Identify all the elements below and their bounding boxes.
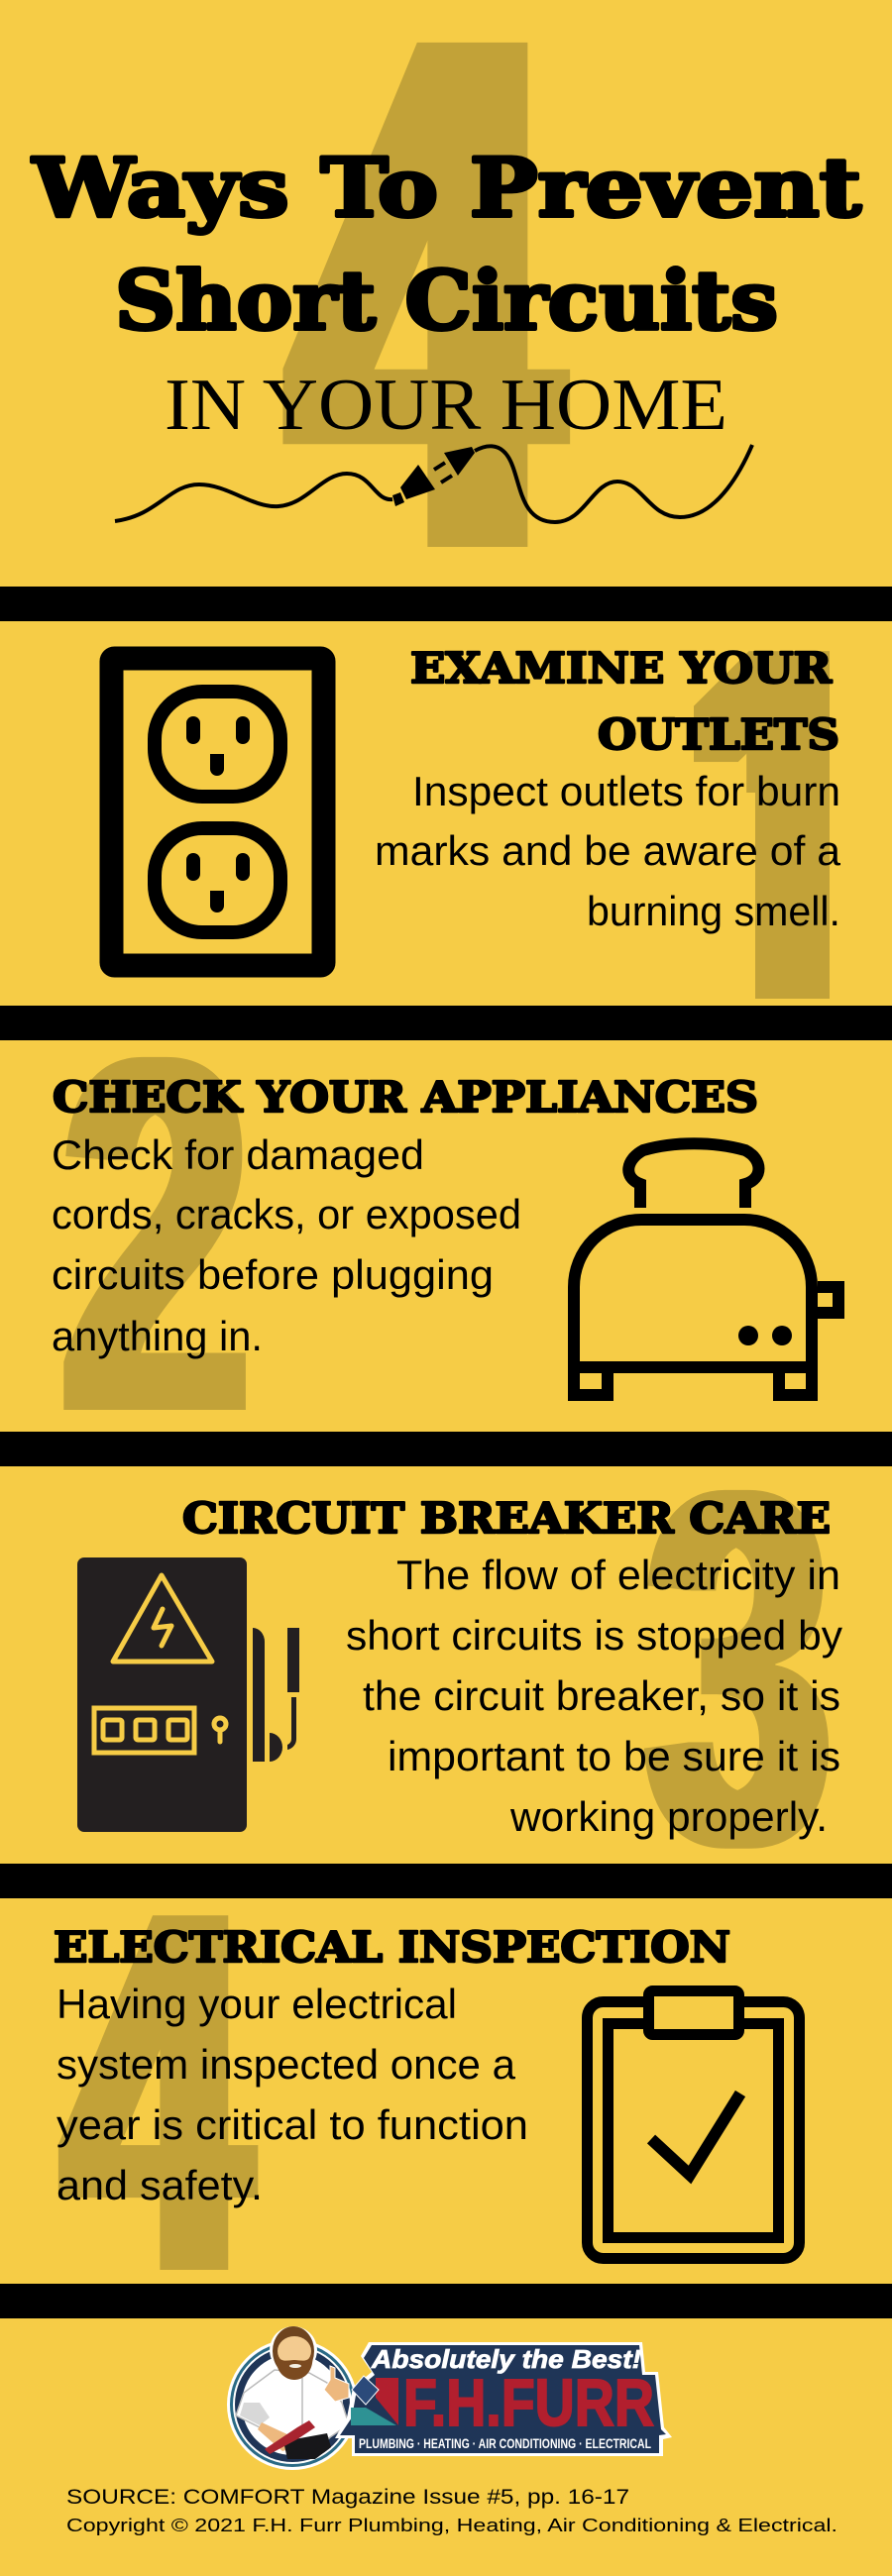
badge circle — [227, 2339, 358, 2470]
title: Short Circuits — [115, 255, 778, 349]
body text — [375, 768, 841, 934]
body text: year is critical to function — [56, 2101, 528, 2148]
logo name: F.H.FURR — [403, 2366, 654, 2440]
body text — [346, 1552, 842, 1840]
heading: ELECTRICAL INSPECTION — [54, 1923, 730, 1972]
numeral 2: 2 — [64, 954, 247, 1518]
banner — [335, 2342, 672, 2456]
divider bar 5 — [0, 2284, 892, 2318]
body text: Having your electrical — [56, 1981, 457, 2027]
body text: working properly. — [509, 1793, 828, 1840]
body text: and safety. — [56, 2162, 263, 2208]
divider bar 2 — [0, 1006, 892, 1040]
heading: CIRCUIT BREAKER CARE — [182, 1494, 831, 1543]
heading: CHECK YOUR APPLIANCES — [53, 1073, 758, 1122]
copyright line: Copyright © 2021 F.H. Furr Plumbing, Heating, Air Conditioning & Electrical. — [66, 2515, 837, 2535]
body text: burning smell. — [587, 888, 840, 934]
logo slogan: Absolutely the Best! — [371, 2344, 641, 2374]
section 2: check your appliances — [52, 954, 838, 1518]
body text: marks and be aware of a — [375, 827, 841, 874]
section 1: examine your outlets — [99, 646, 840, 999]
subtitle: IN YOUR HOME — [165, 365, 727, 446]
icon: outlet — [111, 658, 323, 965]
divider bar 4 — [0, 1864, 892, 1898]
body text: important to be sure it is — [388, 1733, 840, 1779]
body text — [52, 1131, 521, 1359]
body text: Check for damaged — [52, 1131, 424, 1178]
body text: cords, cracks, or exposed — [52, 1191, 521, 1237]
body text: anything in. — [52, 1313, 263, 1359]
icon: toaster — [574, 1143, 838, 1395]
icon: clipboard — [587, 1991, 799, 2259]
icon: unplugged cord — [115, 445, 752, 522]
body text: the circuit breaker, so it is — [363, 1672, 840, 1719]
source line: SOURCE: COMFORT Magazine Issue #5, pp. 16-17 — [66, 2486, 629, 2509]
heading: OUTLETS — [598, 710, 839, 759]
logo services: PLUMBING · HEATING · AIR CONDITIONING · ELECTRICAL — [359, 2436, 651, 2451]
numeral 1: 1 — [693, 543, 875, 1107]
body text: The flow of electricity in — [396, 1552, 840, 1598]
numeral 4: 4 — [66, 1805, 249, 2380]
title: Ways To Prevent — [32, 142, 862, 236]
body text: Inspect outlets for burn — [412, 768, 840, 814]
logo: F.H. Furr — [227, 2326, 672, 2470]
numeral 3: 3 — [648, 1385, 829, 1950]
heading — [410, 644, 839, 759]
heading: EXAMINE YOUR — [410, 644, 833, 693]
divider bar 3 — [0, 1432, 892, 1466]
body text: short circuits is stopped by — [346, 1612, 842, 1659]
title — [32, 142, 862, 349]
section 3: circuit breaker care — [77, 1385, 842, 1950]
body text: circuits before plugging — [52, 1251, 494, 1298]
body text: system inspected once a — [56, 2041, 516, 2088]
icon: circuit breaker — [77, 1557, 299, 1832]
section 4: electrical inspection — [54, 1805, 799, 2380]
body text — [56, 1981, 528, 2208]
divider bar 1 — [0, 587, 892, 621]
mascot — [236, 2326, 349, 2459]
